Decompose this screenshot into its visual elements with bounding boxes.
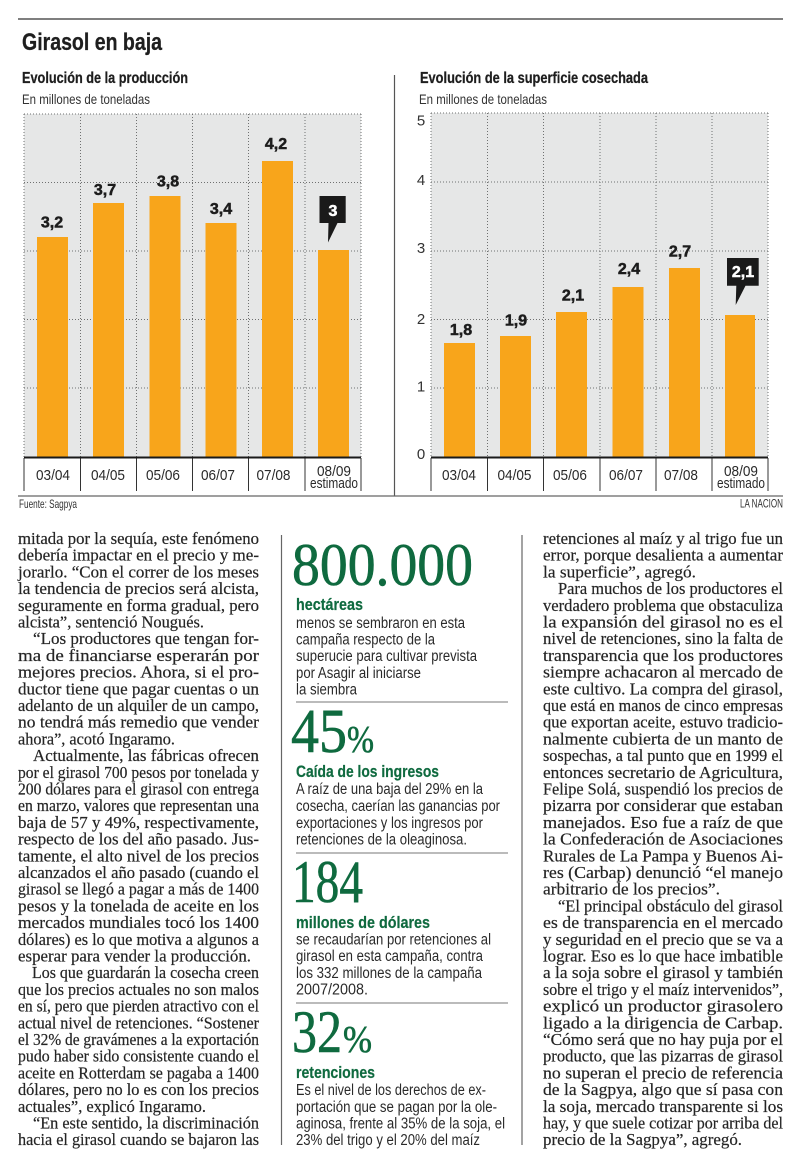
stat: 45%: retenciones de la oleaginosa. xyxy=(296,832,467,848)
text block: left article column: seguramente en forma gradual, pero xyxy=(18,596,259,615)
text block: right article column: transparencia que los productores xyxy=(543,646,783,665)
y axis labels: 3 xyxy=(417,240,425,257)
text block: right article column: Rurales de La Pampa y Buenos Ai- xyxy=(543,846,783,865)
text block: left article column: por el girasol 700 pesos por tonelada y xyxy=(18,763,259,782)
stat: 800.000 hectáreas: la siembra xyxy=(296,682,357,698)
text block: left article column: adelanto de un alquiler de un campo, xyxy=(18,696,259,715)
stat: 45% xyxy=(291,698,500,848)
text block: right article column: nalmente cubierta de un manto de xyxy=(543,729,783,748)
x axis: 05/06 xyxy=(553,467,587,484)
panel: production chart xyxy=(22,70,361,492)
text block: left article column: que los precios actuales no son malos xyxy=(18,980,259,999)
value labels: 3,8 xyxy=(157,174,179,190)
text block: right article column: Para muchos de los productores el xyxy=(558,579,783,598)
text block: left article column: tamente, el alto nivel de los precios xyxy=(18,846,259,865)
stat: 184 millones de dólares: 2007/2008. xyxy=(296,982,368,998)
x axis: 07/08 xyxy=(664,467,698,484)
text block: left article column: en sí, pero que pierden atractivo con el xyxy=(18,997,259,1016)
stat: 184 millones de dólares: los 332 millones de la campaña xyxy=(296,965,482,982)
text block: right article column: Felipe Solá, suspendió los precios de xyxy=(543,780,783,798)
text block: right article column: a la soja sobre el girasol y también xyxy=(543,963,783,982)
text block: right article column: de la Sagpya, algo que sí pasa con xyxy=(543,1080,784,1099)
source credit: Fuente: Sagpya xyxy=(19,497,77,511)
value labels: 2,4 xyxy=(618,261,640,278)
text block: left article column: girasol se llegó a pagar a más de 1400 xyxy=(18,880,259,899)
stat: 32% retenciones: 32 xyxy=(292,999,342,1065)
text block: left article column: la tendencia de precios será alcista, xyxy=(18,579,259,598)
stat: 800.000 hectáreas: campaña respecto de la xyxy=(296,632,435,648)
text block: right article column: “El principal obstáculo del girasol xyxy=(558,896,783,915)
y axis labels xyxy=(417,112,425,463)
text block: right article column: retenciones al maíz y al trigo fue un xyxy=(543,529,783,548)
panel: harvested area chart xyxy=(417,70,768,492)
stat: 32% retenciones: aginosa, frente al 35% de la soja, el xyxy=(296,1116,505,1132)
stat: 32% retenciones: portación que se pagan por la ole- xyxy=(296,1099,497,1116)
plot background and grid xyxy=(24,114,361,457)
x axis: 07/08 xyxy=(256,467,290,484)
text block: right article column: es de transparencia en el mercado xyxy=(543,913,783,932)
stat: 32% retenciones xyxy=(292,999,505,1149)
stat: 800.000 hectáreas: 800.000 xyxy=(292,532,473,598)
stat: 184 millones de dólares xyxy=(292,849,491,998)
bars xyxy=(37,161,349,457)
text block: right article column: “Cómo será que no hay puja por el xyxy=(543,1030,783,1049)
text block: left article column: esperar para vender la producción. xyxy=(18,946,251,966)
text block: left article column: pesos y la tonelada de aceite en los xyxy=(18,896,259,915)
text block: left article column: dólares) es lo que motiva a algunos a xyxy=(18,930,259,949)
text block: right article column: la expansión del girasol no es el xyxy=(543,612,783,632)
x axis: 05/06 xyxy=(146,467,180,484)
stat: 45%: A raíz de una baja del 29% en la xyxy=(296,781,483,798)
x axis: 03/04 xyxy=(442,467,476,484)
stat: 800.000 hectáreas: por Asagir al iniciarse xyxy=(296,665,421,682)
y axis labels: 4 xyxy=(417,172,425,189)
text block: left article column: hacia el girasol cuando se bajaron las xyxy=(18,1130,259,1149)
value labels: 2,7 xyxy=(669,244,691,260)
text block: right article column: pizarra por considerar que estaban xyxy=(543,796,784,815)
text block: left article column: actual nivel de retenciones. “Sostener xyxy=(18,1013,259,1032)
stat: 800.000 hectáreas: hectáreas xyxy=(296,595,363,614)
value labels: 1,8 xyxy=(450,322,472,339)
text block: left article column: mejores precios. Ahora, si el pro- xyxy=(18,663,259,682)
stat: 800.000 hectáreas xyxy=(292,532,477,698)
x axis: 04/05 xyxy=(91,467,125,484)
text block: left article column: dólares, pero no lo es con los precios xyxy=(18,1080,259,1099)
callout: estimated value: 2,1 xyxy=(732,264,754,281)
text block: right article column: arbitrario de los precios”. xyxy=(543,880,720,899)
x axis xyxy=(431,458,768,492)
text block: right article column: verdadero problema que obstaculiza xyxy=(543,596,783,615)
text block: left article column: mitada por la sequía, este fenómeno xyxy=(18,529,259,548)
x axis: 08/09 xyxy=(317,463,351,480)
text block: right article column: entonces secretario de Agricultura, xyxy=(543,763,783,782)
stat: 184 millones de dólares: 184 xyxy=(292,849,363,915)
stat: 800.000 hectáreas: menos se sembraron en esta xyxy=(296,615,465,632)
publisher credit: LA NACION xyxy=(740,498,783,510)
value labels: 2,1 xyxy=(562,288,584,304)
text block: left article column: aceite en Rotterdam se pagaba a 1400 xyxy=(18,1063,259,1082)
stat: 45%: cosecha, caerían las ganancias por xyxy=(296,798,500,815)
text block: left article column: jorarlo. “Con el correr de los meses xyxy=(17,562,259,581)
text block: left article column: mercados mundiales tocó los 1400 xyxy=(18,913,259,932)
y axis labels: 5 xyxy=(417,112,425,130)
stat: 45%: exportaciones y los ingresos por xyxy=(296,815,483,832)
x axis: estimado xyxy=(717,475,765,492)
text block: right article column: ligado a la dirigencia de Carbap. xyxy=(543,1013,783,1032)
text block: right article column: y seguridad en el precio que se va a xyxy=(543,930,783,949)
text block: right article column: este cultivo. La compra del girasol, xyxy=(543,679,783,698)
stat: 184 millones de dólares: millones de dólares xyxy=(296,913,430,932)
text block: left article column: alcista”, sentenció Nougués. xyxy=(18,612,204,632)
stat: 32% retenciones: retenciones xyxy=(296,1063,375,1082)
x axis xyxy=(24,458,361,492)
text block: right article column: no superan el precio de referencia xyxy=(543,1063,783,1082)
stat: 32% retenciones: Es el nivel de los derechos de ex- xyxy=(296,1082,486,1099)
text block: right article column: sospechas, a tal punto que en 1999 el xyxy=(543,746,783,765)
x axis: estimado xyxy=(310,475,358,492)
text block: left article column: ductor tiene que pagar cuentas o un xyxy=(18,679,259,698)
stat: 32% retenciones: % xyxy=(343,1019,372,1061)
text block: right article column: siempre achacaron al mercado de xyxy=(543,663,783,682)
text block: left article column: pudo haber sido consistente cuando el xyxy=(18,1047,259,1066)
value labels xyxy=(450,244,691,339)
text block: left article column: respecto de los del año pasado. Jus- xyxy=(18,830,259,849)
value labels: 1,9 xyxy=(505,312,527,330)
plot background and grid xyxy=(431,113,768,457)
x axis: 06/07 xyxy=(609,467,643,484)
x axis: 08/09 xyxy=(724,463,758,480)
stat: 800.000 hectáreas: superucie para cultivar prevista xyxy=(296,648,477,665)
stat: 184 millones de dólares: se recaudarían por retenciones al xyxy=(296,932,491,948)
text block: left article column: no tendrá más remedio que vender xyxy=(18,713,259,732)
text block: left article column: ma de financiarse esperarán por xyxy=(18,646,259,665)
y axis labels: 1 xyxy=(417,378,425,396)
stat: 45%: % xyxy=(347,719,374,761)
text block: right article column: nivel de retenciones, sino la falta de xyxy=(543,629,783,648)
value labels xyxy=(41,136,287,232)
panel: key figures sidebar xyxy=(291,532,508,1149)
stat: 45%: 45 xyxy=(291,698,347,766)
text block: right article column: la Confederación de Asociaciones xyxy=(543,830,783,849)
y axis labels: 2 xyxy=(417,311,425,328)
text block: left article column: “En este sentido, la discriminación xyxy=(33,1114,259,1132)
text block: left article column: 200 dólares para el girasol con entrega xyxy=(18,780,259,798)
text block: right article column: la soja, mercado transparente si los xyxy=(543,1097,783,1116)
value labels: 3,2 xyxy=(41,214,63,232)
text block: left article column: ahora”, acotó Ingaramo. xyxy=(18,729,175,748)
callout: estimated value xyxy=(320,196,346,242)
callout: estimated value xyxy=(727,258,759,305)
y axis labels: 0 xyxy=(417,446,425,463)
text block: right article column: hay, y que suele cotizar por arriba del xyxy=(543,1114,783,1132)
chart heading: Evolución de la superficie cosechada xyxy=(420,70,648,87)
title: Girasol en baja xyxy=(22,29,163,56)
x axis: 06/07 xyxy=(201,467,235,484)
text block: left article column: el 32% de gravámenes a la exportación xyxy=(18,1030,259,1049)
text block: right article column: que exportan aceite, estuvo tradicio- xyxy=(543,713,783,732)
bars xyxy=(444,268,755,457)
text block: left article column xyxy=(17,529,259,1149)
x axis: 03/04 xyxy=(36,467,70,484)
text block: right article column: error, porque desalienta a aumentar xyxy=(543,546,783,565)
callout: estimated value: 3 xyxy=(329,203,338,220)
stat: 184 millones de dólares: girasol en esta campaña, contra xyxy=(296,948,483,965)
text block: left article column: debería impactar en el precio y me- xyxy=(18,546,259,565)
text block: right article column: manejados. Eso fue a raíz de que xyxy=(543,813,783,832)
chart heading: Evolución de la producción xyxy=(22,70,188,87)
value labels: 3,7 xyxy=(94,182,116,199)
text block: right article column: precio de la Sagpya”, agregó. xyxy=(543,1130,742,1149)
text block: right article column xyxy=(543,529,784,1149)
text block: right article column: explicó un productor girasolero xyxy=(543,997,783,1016)
chart subtitle: En millones de toneladas xyxy=(22,91,150,107)
text block: right article column: lograr. Eso es lo que hace imbatible xyxy=(543,946,783,966)
text block: right article column: que está en manos de cinco empresas xyxy=(543,696,783,715)
text block: left article column: Actualmente, las fábricas ofrecen xyxy=(33,746,259,765)
chart subtitle: En millones de toneladas xyxy=(419,91,547,107)
text block: right article column: la superficie”, agregó. xyxy=(543,562,696,581)
text block: right article column: producto, que las pizarras de girasol xyxy=(543,1047,783,1066)
stat: 45%: Caída de los ingresos xyxy=(296,762,439,781)
text block: left article column: alcanzados el año pasado (cuando el xyxy=(18,863,259,882)
x axis: 04/05 xyxy=(498,467,532,484)
text block: left article column: en marzo, valores que representan una xyxy=(18,796,259,815)
value labels: 4,2 xyxy=(265,136,287,153)
text block: right article column: res (Carbap) denunció “el manejo xyxy=(543,863,783,882)
text block: left article column: “Los productores que tengan for- xyxy=(33,629,259,648)
text block: right article column: sobre el trigo y el maíz intervenidos”, xyxy=(543,980,783,999)
stat: 32% retenciones: 23% del trigo y el 20% del maíz xyxy=(296,1132,480,1149)
text block: left article column: baja de 57 y 49%, respectivamente, xyxy=(18,813,259,832)
text block: left article column: actuales”, explicó Ingaramo. xyxy=(18,1097,206,1116)
value labels: 3,4 xyxy=(210,201,232,218)
text block: left article column: Los que guardarán la cosecha creen xyxy=(32,963,259,982)
